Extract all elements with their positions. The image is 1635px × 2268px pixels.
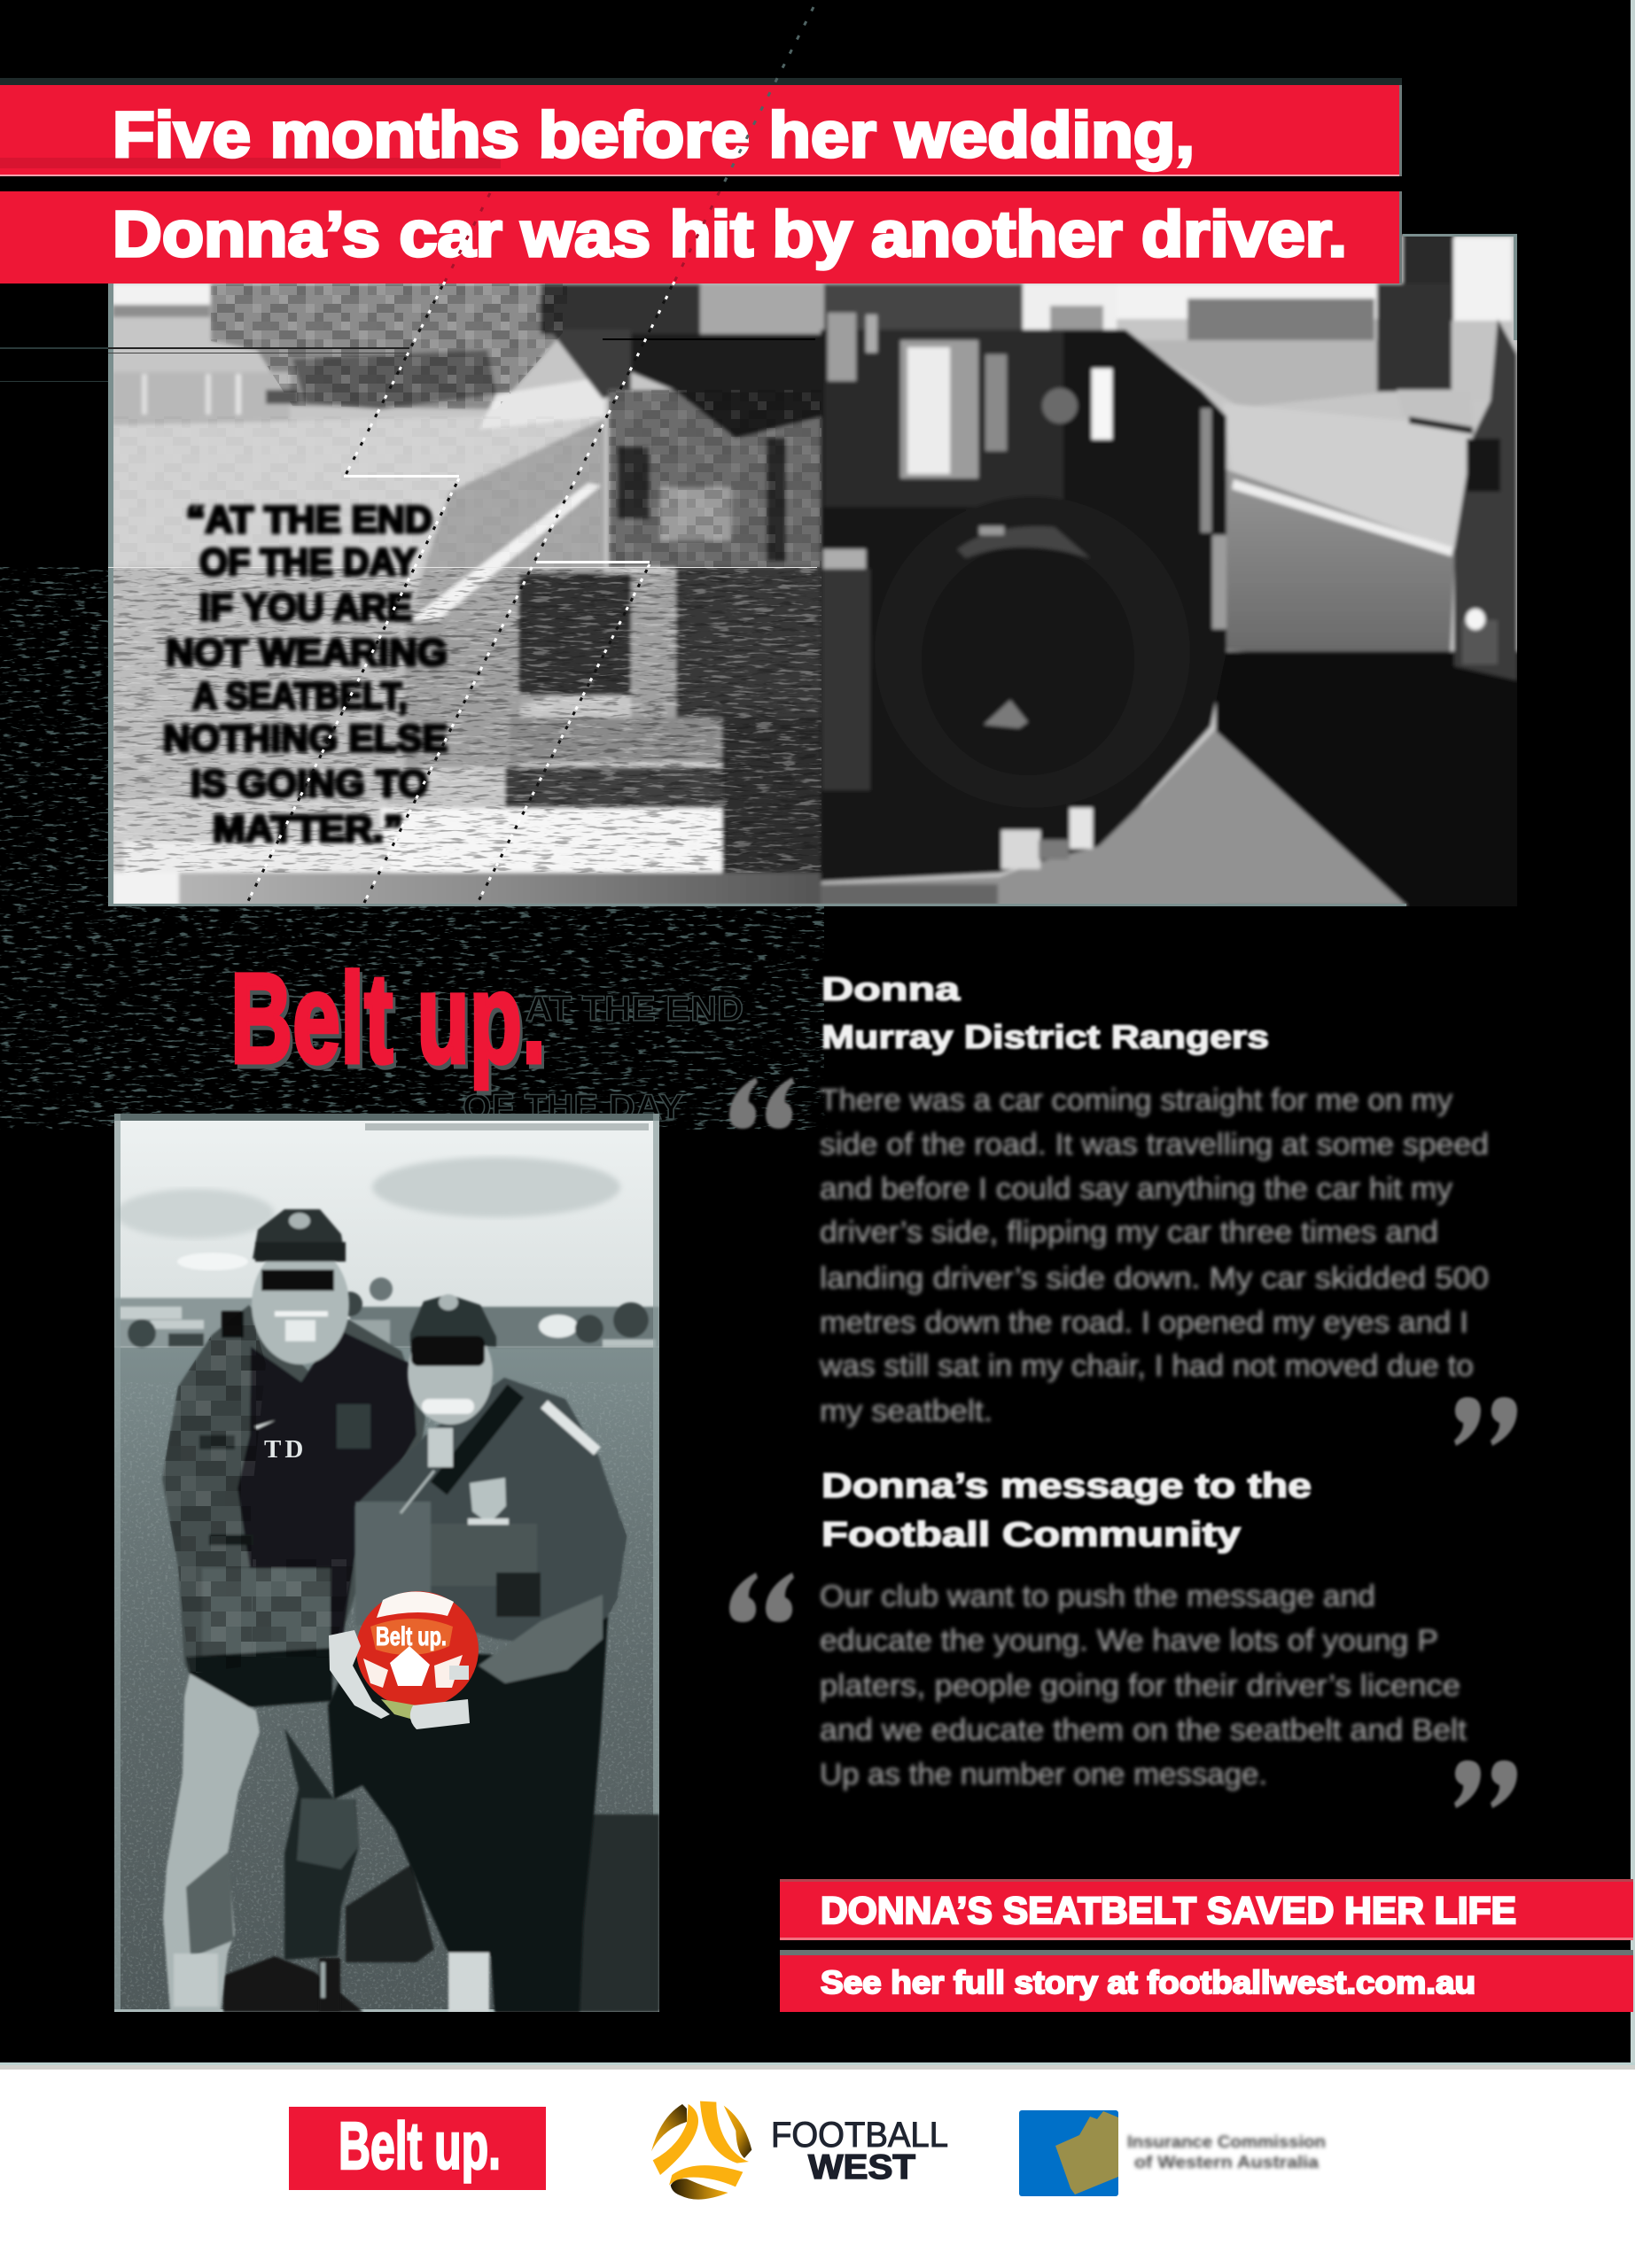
photo: glitch texture	[108, 234, 1517, 906]
photo: ball and hands: Belt up.	[376, 1622, 447, 1651]
ghost pull quote fragments: AT THE END	[526, 990, 744, 1029]
crash account quote text: my seatbelt.	[820, 1394, 993, 1428]
pull quote on photo: NOTHING ELSE	[163, 718, 448, 760]
message heading: Donna’s message to the	[821, 1467, 1312, 1505]
banner bar 2	[0, 191, 1400, 284]
footer: logo strip	[0, 2062, 1635, 2268]
crash account quote text: landing driver’s side down. My car skidded 500	[820, 1262, 1489, 1295]
crash account quote text: There was a car coming straight for me on my	[820, 1084, 1452, 1117]
crash account quote text: was still sat in my chair, I had not moved due to	[819, 1349, 1474, 1383]
headline line 2: Donna’s car was hit by another driver.	[113, 199, 1347, 270]
photo: road seen past a car mirror	[108, 234, 1526, 917]
Belt up heading logo: Belt up.	[230, 947, 546, 1090]
message quote text: platers, people going for their driver’s licence	[820, 1669, 1460, 1703]
name and club heading: Murray District Rangers	[821, 1019, 1269, 1055]
photo: Donna and club member with ball	[114, 1114, 659, 2012]
crash account quote text: side of the road. It was travelling at some speed	[820, 1128, 1489, 1161]
photo: frame edges	[114, 1114, 659, 2012]
photo: TD initials: TD	[264, 1435, 307, 1464]
message quote text: and we educate them on the seatbelt and Belt	[820, 1713, 1468, 1747]
crash account quote text: driver’s side, flipping my car three times and	[820, 1216, 1438, 1249]
name and club heading: Donna	[821, 971, 961, 1007]
crash account quote text	[819, 1084, 1489, 1428]
pull quote on photo: IF YOU ARE	[199, 586, 412, 629]
pull quote on photo: MATTER.”	[213, 808, 403, 850]
photo: man	[162, 1209, 425, 2012]
callout: full story link: See her full story at footballwest.com.au	[821, 1964, 1475, 2000]
callout: full story link	[780, 1950, 1633, 2012]
logo: Belt up	[289, 2107, 546, 2190]
message heading: Football Community	[821, 1516, 1241, 1554]
photo: jacket mosaic	[162, 1305, 627, 1674]
logo: Insurance Commission of WA: Insurance Commission	[1127, 2133, 1326, 2152]
photo: scenery left of mirror	[113, 284, 821, 906]
message quote text: Our club want to push the message and	[820, 1580, 1375, 1613]
crash account quote text: and before I could say anything the car hit my	[820, 1172, 1452, 1206]
photo: sky and field	[114, 1114, 659, 2012]
panel: Donna's story	[729, 971, 1517, 1808]
photo: centre pillar	[505, 284, 824, 873]
photo: mirror housing	[821, 284, 1226, 882]
logo: Insurance Commission of WA: of Western Australia	[1134, 2154, 1319, 2172]
pull quote on photo: OF THE DAY	[199, 541, 417, 584]
diagonal dashed glitch lines	[247, 7, 814, 903]
logo: Football West	[651, 2101, 948, 2200]
photo: far field and road right	[821, 234, 1522, 917]
photo: ball and hands	[329, 1591, 479, 1729]
crash account quote text: metres down the road. I opened my eyes and I	[820, 1306, 1468, 1340]
message quote text: Up as the number one message.	[820, 1758, 1267, 1791]
pull quote on photo: NOT WEARING	[166, 632, 448, 674]
message quote text: educate the young. We have lots of young P	[820, 1624, 1438, 1658]
banner bar 1	[0, 85, 1400, 176]
name and club heading	[821, 971, 1269, 1055]
pull quote on photo: A SEATBELT,	[192, 675, 408, 718]
ghost pull quote fragments	[463, 990, 744, 1127]
headline banner	[0, 78, 1402, 284]
icon: open quote	[729, 1077, 794, 1129]
ghost pull quote fragments: OF THE DAY	[463, 1088, 683, 1127]
icon: open quote 2	[729, 1573, 794, 1622]
pull quote on photo: IS GOING TO	[191, 763, 428, 805]
message heading	[821, 1467, 1312, 1554]
icon: close quote 2	[1454, 1760, 1517, 1808]
photo: woman	[174, 1294, 627, 2012]
headline line 1: Five months before her wedding,	[113, 100, 1195, 171]
photo: cast shadows	[223, 1814, 659, 2012]
logo: Football West: FOOTBALL	[771, 2116, 948, 2155]
message quote text	[820, 1580, 1468, 1791]
callout: seatbelt saved her life: DONNA’S SEATBELT SAVED HER LIFE	[821, 1890, 1516, 1932]
logo: Insurance Commission of WA	[1019, 2110, 1326, 2196]
callout: seatbelt saved her life	[780, 1879, 1633, 1940]
pull quote on photo	[163, 499, 448, 850]
icon: close quote	[1454, 1397, 1517, 1446]
logo: Football West: WEST	[808, 2148, 915, 2186]
glitch noise field	[0, 347, 828, 1130]
right edge line	[1631, 0, 1635, 2064]
logo: Belt up: Belt up.	[339, 2109, 501, 2183]
pull quote on photo: “AT THE END	[186, 499, 432, 541]
